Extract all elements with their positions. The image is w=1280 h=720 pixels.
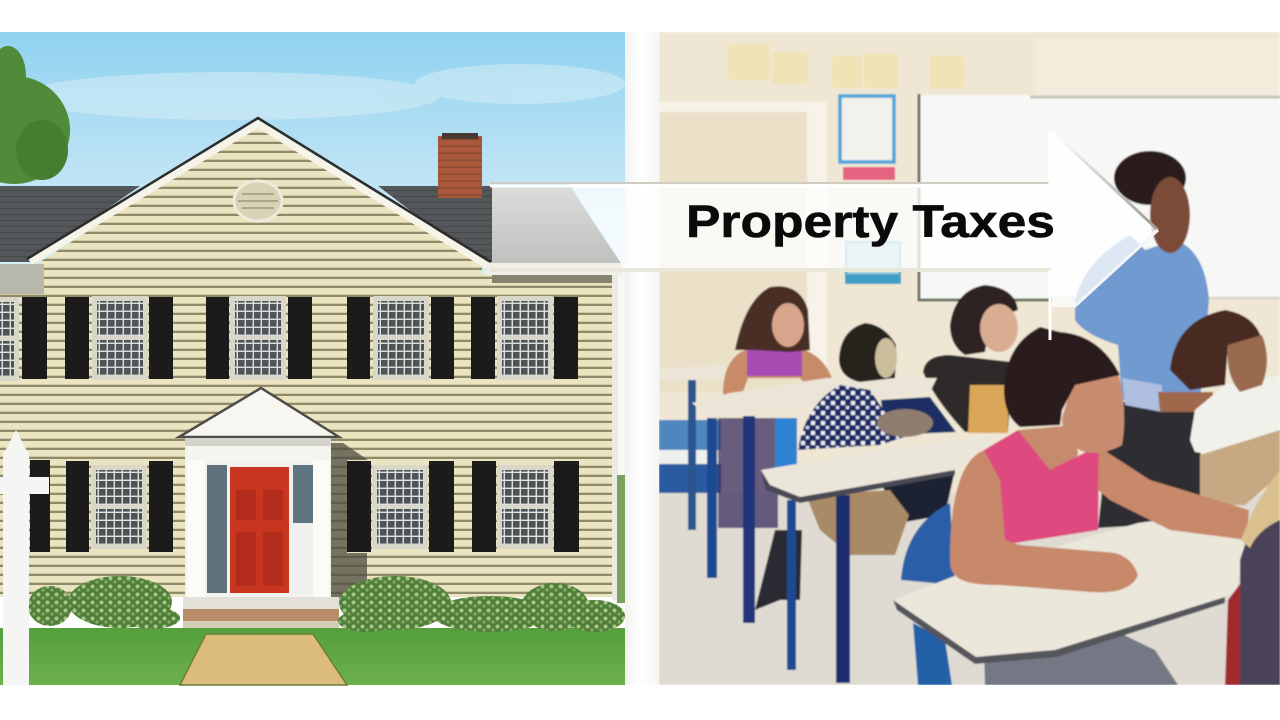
banner arrow — [490, 131, 1158, 340]
right roof — [378, 186, 492, 262]
path — [180, 634, 347, 685]
pale strip beside house — [612, 270, 625, 605]
porch and red door — [179, 388, 368, 631]
heading: Property Taxes — [686, 196, 1055, 247]
white gap between panels — [625, 32, 659, 685]
door — [230, 467, 289, 593]
teacher — [1075, 151, 1213, 528]
student at right edge — [1225, 470, 1280, 685]
second desk — [692, 378, 937, 623]
upper windows row — [0, 296, 578, 381]
corner trim — [612, 275, 618, 600]
gable vent — [234, 181, 282, 221]
arrow outline — [490, 131, 1158, 340]
student: child with printed shirt — [755, 323, 955, 610]
student: far right — [1170, 310, 1280, 505]
gable — [40, 122, 482, 280]
blue baseboard — [659, 420, 721, 493]
back left desk — [660, 365, 725, 530]
front student arms — [950, 447, 1249, 592]
tree — [0, 46, 70, 184]
left roof — [0, 186, 140, 262]
front desk — [893, 508, 1249, 664]
whiteboard — [919, 94, 1280, 300]
left eave — [0, 264, 44, 294]
shrubs — [28, 576, 625, 632]
front student trousers — [984, 633, 1178, 685]
green hedge at right edge — [617, 475, 625, 603]
floor — [659, 493, 1280, 685]
small blue sign — [846, 242, 900, 283]
sticky notes — [728, 44, 964, 88]
sign post — [0, 430, 49, 685]
garage roof — [492, 186, 621, 263]
clouds — [20, 64, 625, 120]
blue chair — [901, 503, 955, 685]
backpack — [881, 397, 956, 435]
lawn — [0, 628, 625, 685]
left panel: house illustration — [0, 32, 625, 685]
right eave — [486, 263, 622, 283]
wall — [659, 32, 1280, 685]
sky — [0, 32, 625, 277]
lower windows row — [30, 460, 579, 552]
gable trim — [27, 118, 491, 266]
chimney — [438, 133, 482, 198]
house wall — [0, 275, 612, 597]
front student torso — [984, 327, 1124, 545]
upper wall panel — [1035, 38, 1280, 94]
right panel: classroom photo — [659, 32, 1280, 685]
pink label — [843, 167, 895, 180]
student: back right girl — [923, 285, 1018, 433]
third desk — [761, 436, 996, 683]
student: back left girl — [723, 286, 836, 400]
door — [659, 102, 827, 392]
blue poster — [840, 96, 894, 162]
